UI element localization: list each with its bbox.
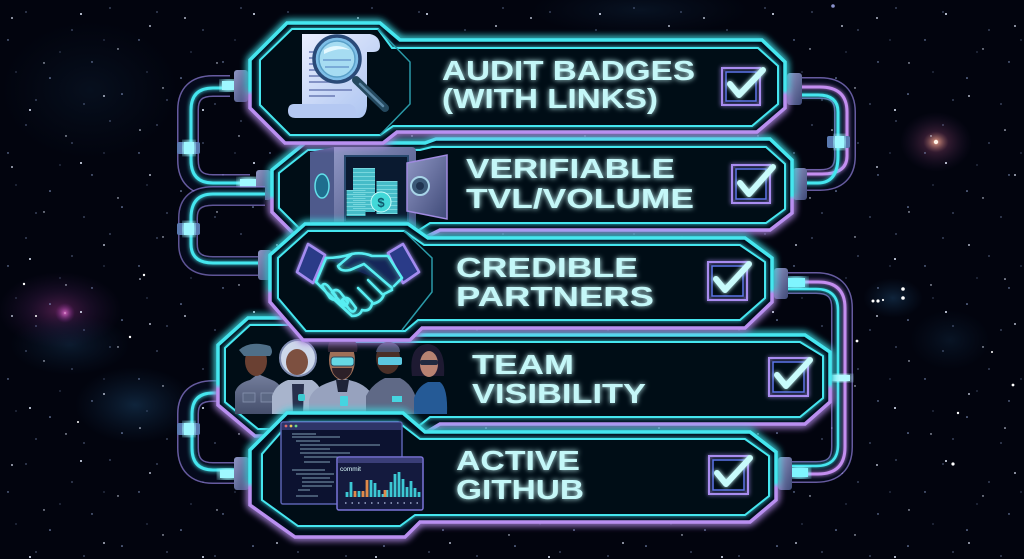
- panel: credible partners: [270, 224, 772, 340]
- text: audit badges: AUDIT BADGES: [442, 55, 695, 86]
- text: audit badges: (WITH LINKS): [442, 83, 658, 114]
- panel: team visibility: [218, 318, 830, 436]
- icon: commit chart window: [337, 457, 423, 510]
- team member 3: [309, 336, 376, 414]
- icon: team of five: [235, 336, 447, 414]
- panel: active github: [250, 413, 776, 537]
- text: verifiable TVL/volume: [466, 153, 694, 214]
- icon: checkbox 1: [722, 68, 763, 105]
- text: team visibility: TEAM: [472, 349, 574, 380]
- team member 4: [366, 342, 416, 414]
- icon: checkbox 2: [732, 165, 773, 203]
- text: verifiable TVL/volume: VERIFIABLE: [466, 153, 675, 184]
- panel: verifiable TVL/volume: [272, 139, 792, 240]
- text: audit badges: [442, 55, 695, 114]
- icon: handshake: [297, 244, 419, 316]
- text: credible partners: [456, 252, 654, 312]
- pipe: top left connector: [177, 70, 271, 200]
- pipe: top right connector: [787, 73, 850, 200]
- text: team visibility: VISIBILITY: [472, 378, 646, 409]
- team member 5: [411, 344, 447, 414]
- pipe: bottom left connector: [177, 391, 249, 490]
- icon: scroll with magnifying glass: [288, 34, 385, 118]
- pipe: right long connector: [774, 268, 850, 490]
- text: verifiable TVL/volume: TVL/VOLUME: [466, 183, 694, 214]
- text: credible partners: PARTNERS: [456, 281, 654, 312]
- panel: audit badges: [250, 23, 785, 143]
- pipe: middle left connector: [177, 194, 272, 280]
- icon: code window: [281, 422, 402, 504]
- icon: commit chart window: commit: [340, 466, 361, 473]
- text: team visibility: [472, 349, 646, 409]
- text: active github: [456, 445, 584, 505]
- icon: checkbox 4: [769, 358, 810, 396]
- text: active github: GITHUB: [456, 474, 584, 505]
- team member 1: [235, 344, 282, 414]
- icon: checkbox 5: [709, 456, 750, 494]
- text: active github: ACTIVE: [456, 445, 580, 476]
- text: credible partners: CREDIBLE: [456, 252, 638, 283]
- icon: safe with coins: [310, 147, 447, 232]
- team member 2: [272, 340, 322, 414]
- icon: safe with coins: $: [377, 195, 385, 210]
- icon: checkbox 3: [708, 262, 749, 300]
